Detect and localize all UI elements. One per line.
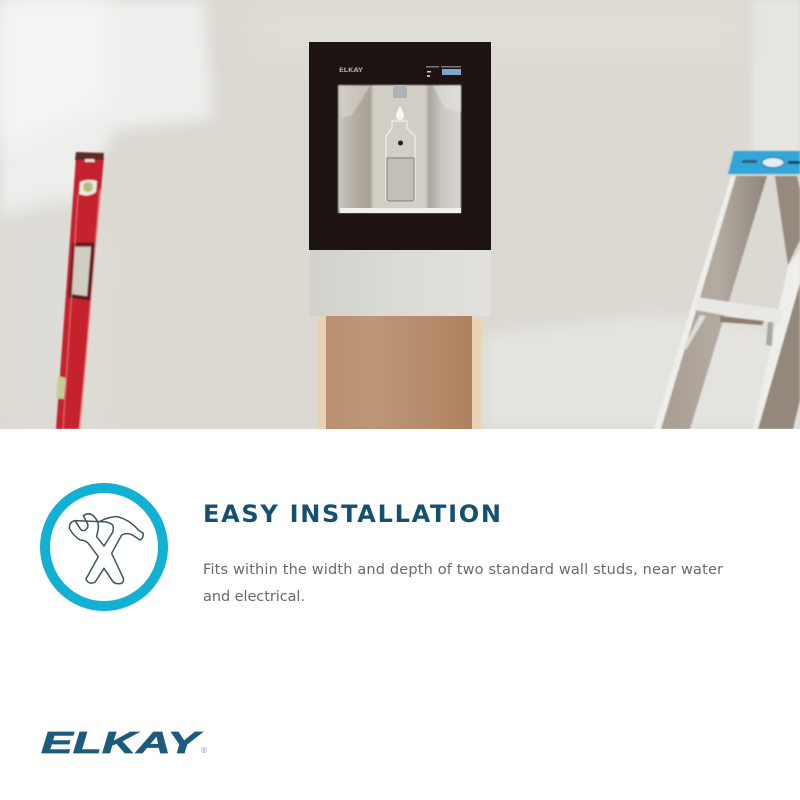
logo: Elkay [41,725,208,760]
blue ladder top [728,151,800,174]
dispenser unit [309,42,491,250]
water drop light [396,106,404,120]
wall reflections in niche [340,86,370,118]
icon: crossed wrench and hammer [69,514,143,584]
recessed niche [338,85,461,213]
heading: EASY INSTALLATION [203,500,501,528]
level tool [56,152,104,429]
drip tray [340,208,461,213]
sensor dot [398,140,403,146]
description text [203,562,723,605]
description text: Fits within the width and depth of two standard wall studs, near water [203,562,723,578]
logo: Elkay: ELKAY [41,725,204,760]
black frame [309,42,491,250]
description text: and electrical. [203,589,305,605]
registered mark: ® [200,746,208,755]
wood framing and cardboard opening [318,316,481,429]
sensor panel [386,121,415,201]
photo: unfinished wall with dispenser and tools [0,0,800,429]
wall background [0,0,800,429]
circle ring [45,488,163,606]
step ladder [654,151,800,429]
stainless mounting box [462,250,491,316]
spout [393,85,407,98]
status display [426,66,461,77]
brand mark on frame: ELKAY [339,66,363,74]
icon: tools in a circle [45,488,163,606]
